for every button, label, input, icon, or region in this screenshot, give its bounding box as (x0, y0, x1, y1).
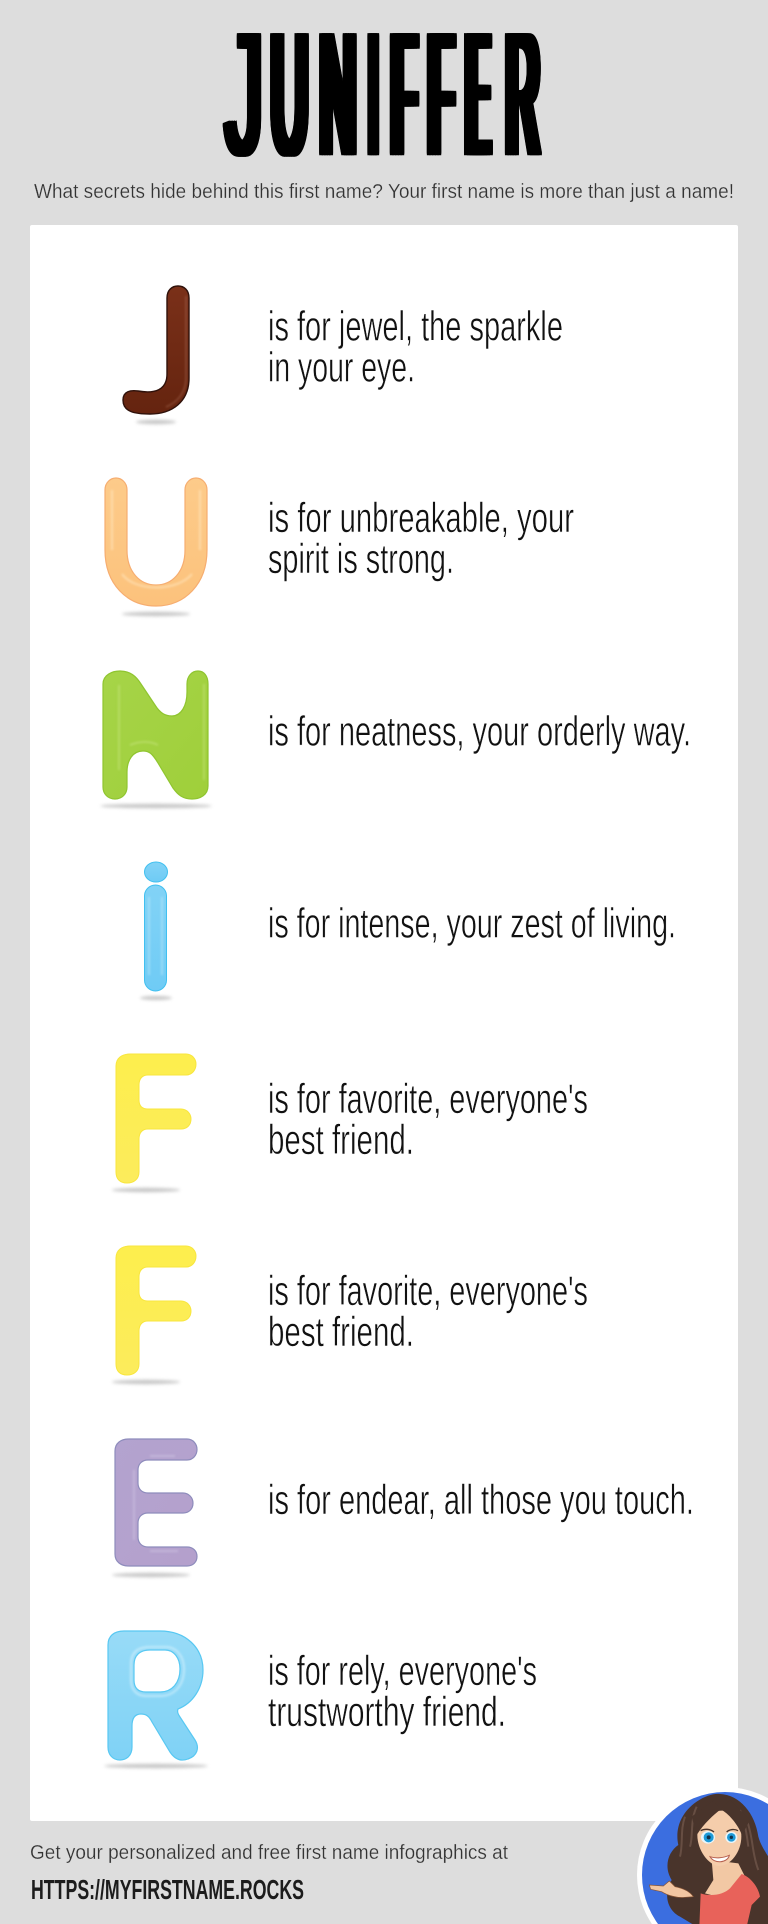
icon: letter U (105, 478, 207, 616)
text: F meaning (268, 1075, 588, 1163)
text: second F meaning (268, 1267, 588, 1355)
text: U meaning: is for unbreakable, your (268, 494, 574, 541)
text: J meaning (268, 302, 563, 390)
icon: letter F (112, 1054, 196, 1192)
title: J (225, 0, 263, 191)
row: second letter F (112, 1246, 588, 1384)
footer caption: Get your personalized and free first name infographics at (30, 1842, 508, 1864)
title: F (392, 0, 416, 191)
avatar: cartoon woman in blue circle (637, 1787, 768, 1924)
panel: white letter list (30, 225, 738, 1821)
text: U meaning (268, 494, 574, 582)
row: letter N (100, 671, 691, 808)
subtitle: What secrets hide behind this first name? Your first name is more than just a name! (34, 181, 734, 203)
title: I (367, 0, 380, 191)
text: R meaning (268, 1647, 537, 1735)
text: J meaning: is for jewel, the sparkle (268, 302, 563, 350)
row: letter F (112, 1054, 588, 1192)
footer url: HTTPS://MYFIRSTNAME.ROCKS (31, 1874, 304, 1905)
row: letter I (140, 862, 676, 1000)
icon: letter I (140, 862, 172, 1000)
text: F meaning: is for favorite, everyone's (268, 1075, 588, 1122)
text: R meaning: is for rely, everyone's (268, 1647, 537, 1694)
icon: letter N (100, 671, 212, 808)
title: U (271, 0, 308, 191)
text: F meaning: best friend. (268, 1116, 414, 1163)
icon: letter F (112, 1246, 196, 1384)
text: R meaning: trustworthy friend. (268, 1688, 506, 1735)
title: R (506, 0, 539, 191)
icon: letter J (123, 286, 189, 424)
icon: letter E (112, 1439, 197, 1577)
title (222, 0, 542, 191)
title: F (429, 0, 453, 191)
row: letter E (112, 1439, 694, 1577)
title: E (467, 0, 489, 191)
row: letter U (105, 478, 574, 616)
text: second F meaning: is for favorite, everyone's (268, 1267, 588, 1314)
row: letter R (104, 1631, 537, 1768)
text: second F meaning: best friend. (268, 1308, 414, 1355)
icon: letter R (104, 1631, 208, 1768)
row: letter J (123, 286, 563, 424)
text: U meaning: spirit is strong. (268, 535, 454, 582)
text: J meaning: in your eye. (268, 344, 415, 390)
title: N (320, 0, 356, 191)
